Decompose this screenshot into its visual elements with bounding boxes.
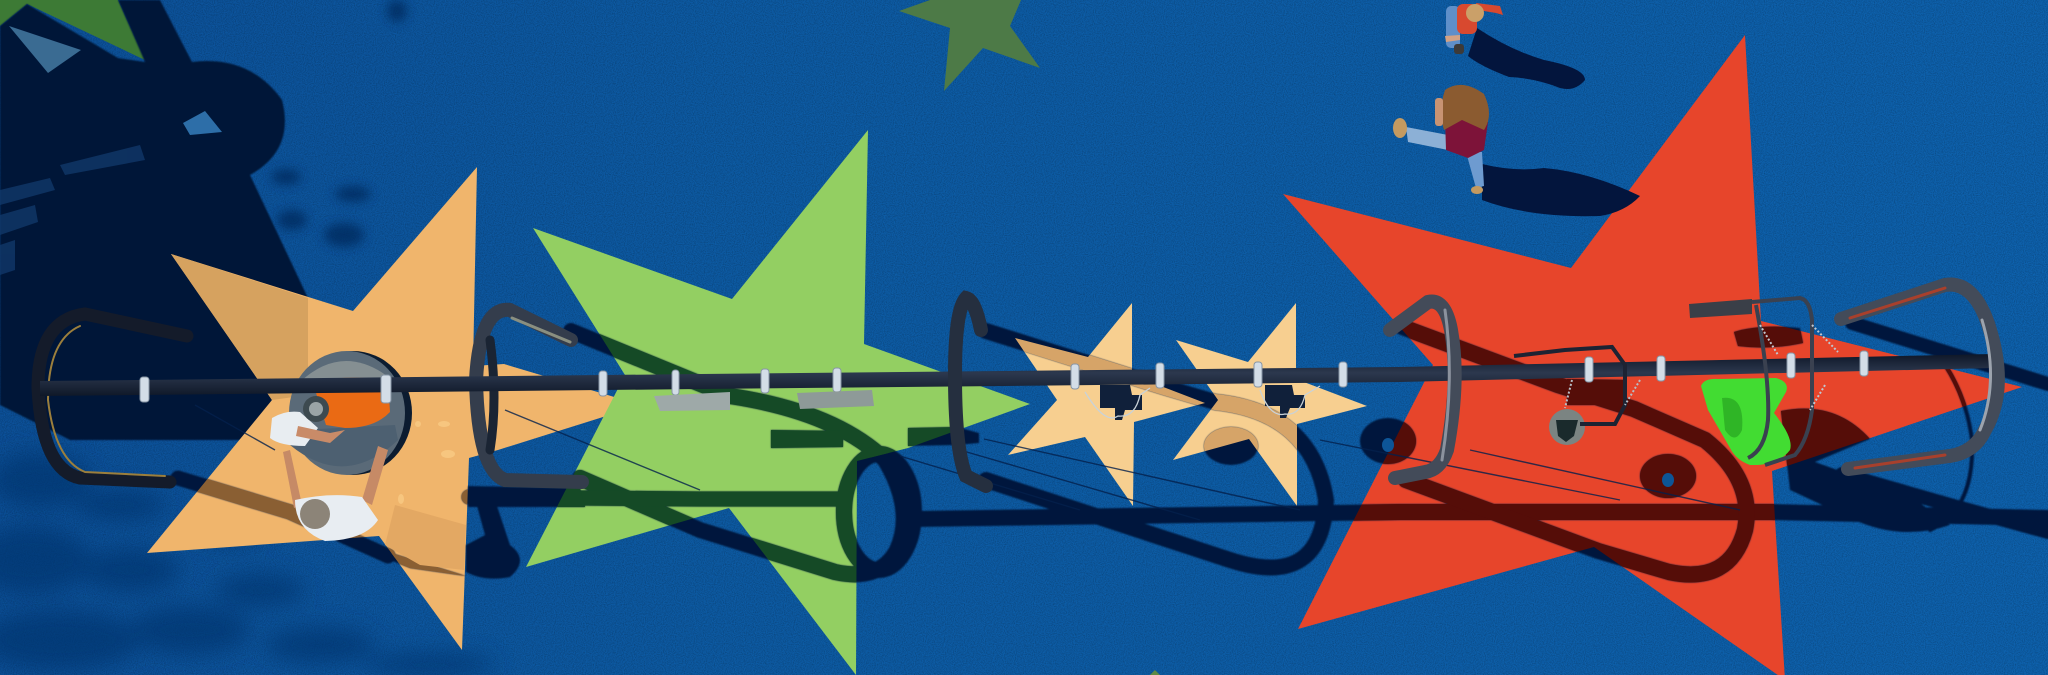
toddler swing on star A bbox=[1085, 385, 1150, 420]
thin chain shadows bbox=[195, 405, 1740, 520]
dappled shadow spots above the orange star bbox=[271, 0, 407, 247]
tan shaded upper-left arm of orange star bbox=[171, 254, 308, 400]
green frog swing seat bbox=[1701, 378, 1791, 465]
striped light on left shadow bbox=[0, 145, 145, 275]
dark green star top centre bbox=[899, 0, 1040, 91]
woman photographing bbox=[1393, 85, 1489, 194]
pale star B bbox=[1173, 303, 1367, 506]
frog swing flat top bracket bbox=[1689, 299, 1752, 318]
frame shadow on pale star A bbox=[1015, 338, 1205, 405]
bench swing seat one bbox=[654, 392, 730, 411]
frame shadow on red star bbox=[1353, 322, 1966, 582]
child shadow bbox=[1468, 28, 1585, 89]
shaded patch on orange star below the roundabout bbox=[385, 505, 466, 570]
red star bbox=[1283, 35, 2022, 675]
roundabout disc seat bbox=[289, 351, 412, 475]
bench swing seat two bbox=[797, 390, 874, 409]
large tree shadow top-left bbox=[0, 0, 308, 440]
frog swing chains bbox=[1760, 325, 1838, 410]
central long bar bbox=[40, 354, 1993, 396]
soft dappled tree shadows at the bottom left bbox=[0, 452, 495, 675]
first hoop bbox=[38, 314, 187, 482]
man in white shirt bbox=[283, 446, 388, 541]
orange star bbox=[147, 167, 641, 650]
fourth hoop bbox=[1390, 302, 1455, 478]
cast shadows of the frame on the blue surface bbox=[178, 323, 2048, 579]
person in orange vest bbox=[270, 378, 390, 446]
bar clamps bbox=[140, 351, 1868, 403]
spots of sunlight on the orange star bbox=[398, 421, 455, 504]
frame shadow on orange star bbox=[197, 479, 468, 576]
frog swing frame bbox=[1748, 298, 1812, 465]
bucket swing with small seat bbox=[1514, 347, 1640, 445]
child walking bbox=[1445, 3, 1503, 54]
bottom edge plant bbox=[1150, 670, 1160, 675]
green star bbox=[526, 130, 1030, 675]
second hoop bbox=[476, 310, 582, 482]
lit patch in tree shadow bbox=[9, 26, 81, 73]
third hoop bbox=[955, 298, 986, 486]
woman shadow bbox=[1482, 164, 1640, 216]
pale star A bbox=[1008, 303, 1205, 506]
frame shadow on green star bbox=[557, 334, 950, 582]
fifth hoop bbox=[1841, 285, 1998, 469]
frame shadow on pale star B bbox=[1204, 393, 1297, 506]
small lit gap in tree shadow bbox=[183, 111, 222, 135]
top-left green star in shadow bbox=[0, 0, 145, 60]
toddler swing on star B bbox=[1260, 385, 1320, 418]
light holes in round shadows bbox=[1382, 438, 1674, 487]
